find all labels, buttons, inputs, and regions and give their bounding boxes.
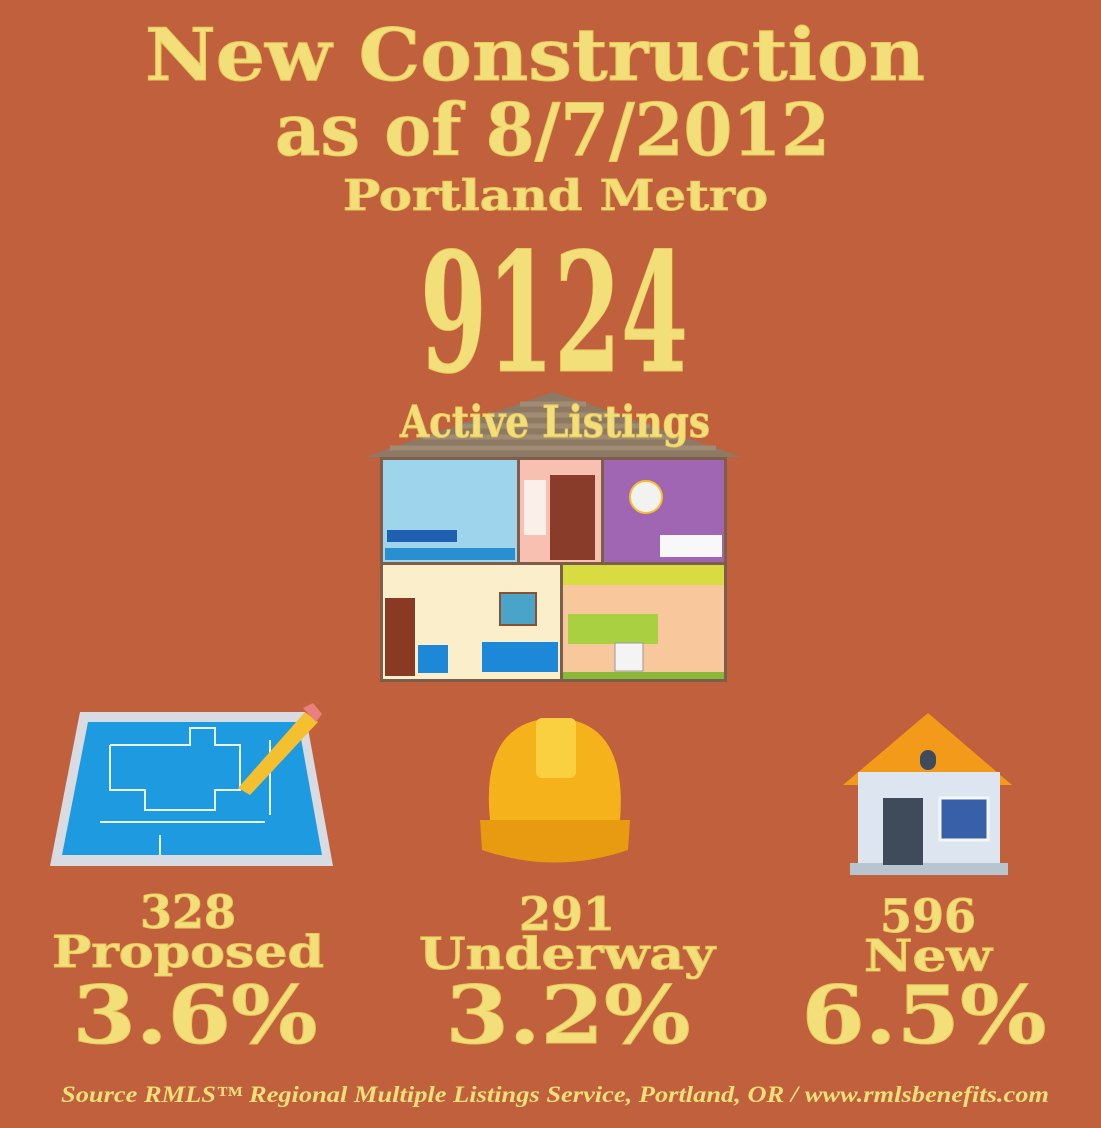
title: as of 8/7/2012 [275,87,830,172]
stat: new: 6.5% [802,968,1046,1062]
icon: blueprint [50,703,333,866]
stat: proposed: 3.6% [72,968,318,1062]
stat: proposed: 328 [140,885,236,939]
subtitle: active listings: Active Listings [399,397,710,448]
big number: 9124 [420,216,688,410]
source footnote: Source RMLS™ Regional Multiple Listings Service, Portland, OR / www.rmlsbenefits.com [61,1082,1049,1107]
stat: proposed: Proposed [52,927,324,978]
stat: underway: Underway [419,929,717,980]
stat: underway: 291 [519,887,615,941]
title [145,12,925,172]
icon: house [843,713,1012,875]
stat: new: New [864,931,993,982]
icon: hard hat [480,718,630,862]
stat: new [802,889,1046,1062]
illustration: house cross-section [365,392,742,682]
stat: underway [419,887,717,1062]
stat: new: 596 [880,889,976,943]
stat: proposed [52,885,324,1062]
title: New Construction [145,12,925,97]
stat: underway: 3.2% [446,968,690,1062]
subtitle: Portland Metro [343,171,768,220]
